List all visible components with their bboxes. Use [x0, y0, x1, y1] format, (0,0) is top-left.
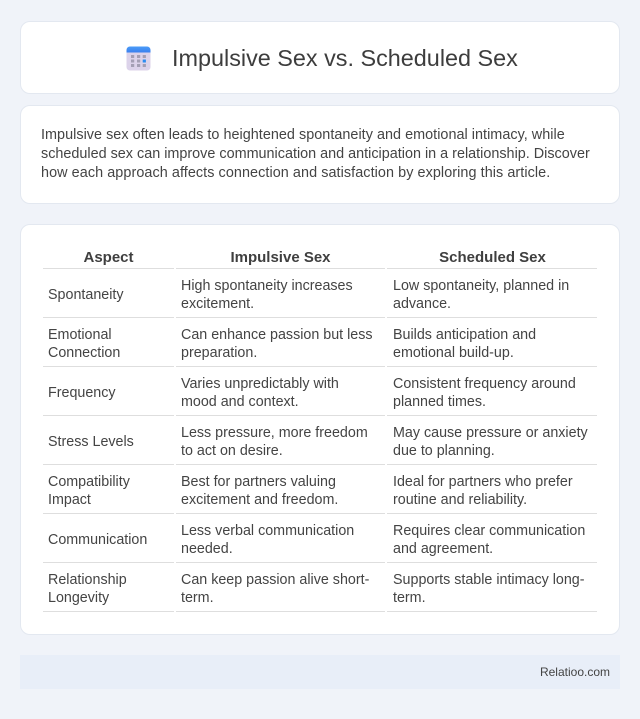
- row: relationship longevity: Longevity: [48, 590, 109, 606]
- row: compatibility impact: [48, 474, 573, 508]
- row: communication: needed.: [181, 541, 233, 557]
- column heading: aspect: Aspect: [83, 249, 134, 266]
- row: emotional connection: [48, 327, 536, 361]
- row: stress levels: [48, 425, 588, 459]
- row: spontaneity: Spontaneity: [48, 287, 124, 303]
- row: communication: [48, 523, 585, 557]
- row: frequency: Varies unpredictably with: [181, 376, 339, 392]
- row: stress levels: Stress Levels: [48, 434, 134, 450]
- table header: [83, 249, 546, 266]
- row: compatibility impact: Best for partners valuing: [181, 474, 336, 490]
- header panel: [20, 21, 620, 94]
- row: stress levels: May cause pressure or anxiety: [393, 425, 588, 441]
- row: relationship longevity: Can keep passion alive short-: [181, 572, 369, 588]
- row: communication: and agreement.: [393, 541, 493, 557]
- row: relationship longevity: Relationship: [48, 572, 127, 588]
- row: spontaneity: excitement.: [181, 296, 254, 312]
- row: compatibility impact: Compatibility: [48, 474, 130, 490]
- row: frequency: Frequency: [48, 385, 116, 401]
- intro text: how each approach affects connection and satisfaction by exploring this article.: [41, 165, 550, 181]
- icon: calendar: [126, 46, 150, 70]
- row: emotional connection: Connection: [48, 345, 120, 361]
- row: emotional connection: emotional build-up.: [393, 345, 514, 361]
- row: stress levels: to act on desire.: [181, 443, 283, 459]
- row: relationship longevity: term.: [181, 590, 214, 606]
- row: stress levels: due to planning.: [393, 443, 495, 459]
- row: spontaneity: advance.: [393, 296, 451, 312]
- row: emotional connection: preparation.: [181, 345, 257, 361]
- intro text: scheduled sex can improve communication and anticipation in a relationship. Discover: [41, 146, 590, 162]
- row: emotional connection: Emotional: [48, 327, 112, 343]
- row: compatibility impact: Impact: [48, 492, 91, 508]
- panel: introduction: [20, 105, 620, 204]
- panel: comparison table: [20, 224, 620, 635]
- column heading: impulsive sex: Impulsive Sex: [230, 249, 331, 266]
- row: compatibility impact: routine and reliability.: [393, 492, 527, 508]
- row: stress levels: Less pressure, more freedom: [181, 425, 368, 441]
- row: frequency: planned times.: [393, 394, 486, 410]
- intro text: Impulsive sex often leads to heightened spontaneity and emotional intimacy, while: [41, 127, 565, 143]
- row: spontaneity: High spontaneity increases: [181, 278, 353, 294]
- column heading: scheduled sex: Scheduled Sex: [439, 249, 546, 266]
- row: communication: Requires clear communication: [393, 523, 585, 539]
- row: frequency: mood and context.: [181, 394, 299, 410]
- row: relationship longevity: Supports stable intimacy long-: [393, 572, 585, 588]
- row: compatibility impact: excitement and freedom.: [181, 492, 338, 508]
- footer credit: Relatioo.com: [540, 665, 610, 679]
- row: emotional connection: Can enhance passion but less: [181, 327, 373, 343]
- row: relationship longevity: term.: [393, 590, 426, 606]
- intro text: [41, 127, 590, 181]
- row: frequency: [48, 376, 576, 410]
- row: frequency: Consistent frequency around: [393, 376, 576, 392]
- row: emotional connection: Builds anticipation and: [393, 327, 536, 343]
- row: communication: Communication: [48, 532, 147, 548]
- row: communication: Less verbal communication: [181, 523, 354, 539]
- footer bar: [20, 655, 620, 689]
- title: Impulsive Sex vs. Scheduled Sex: [172, 45, 518, 71]
- row: relationship longevity: [48, 572, 585, 606]
- row: spontaneity: Low spontaneity, planned in: [393, 278, 569, 294]
- row: compatibility impact: Ideal for partners who prefer: [393, 474, 573, 490]
- row: spontaneity: [48, 278, 569, 312]
